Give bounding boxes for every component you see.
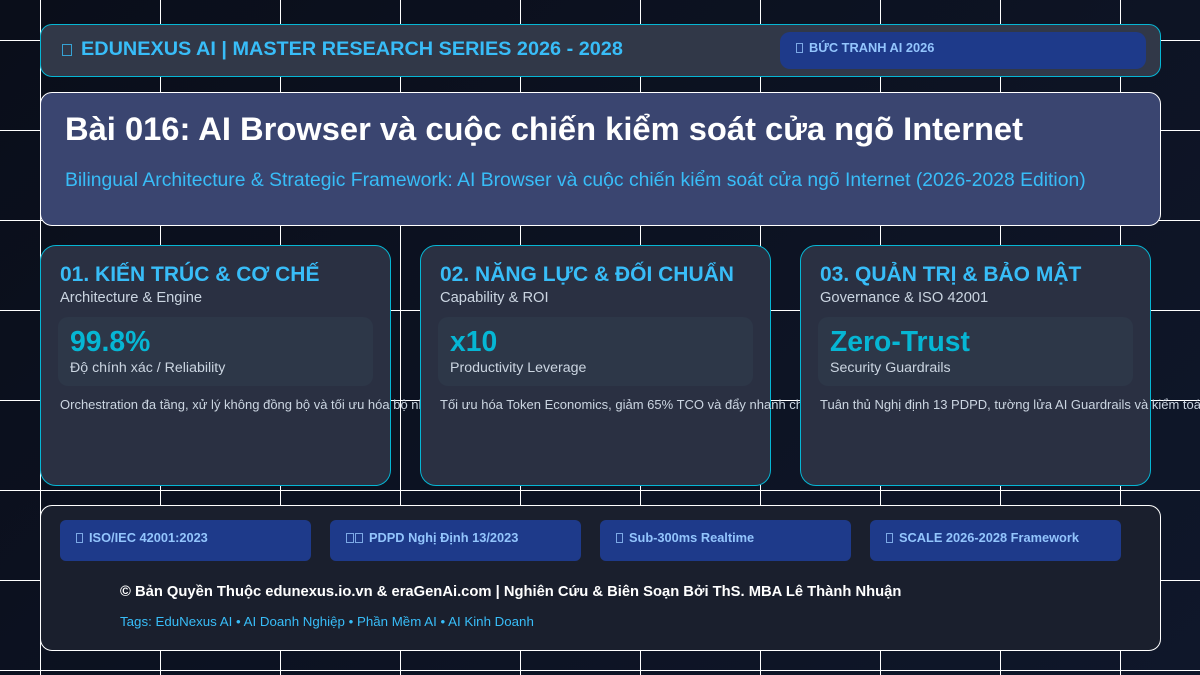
panel: capability card <box>420 245 771 486</box>
card subheading: Capability & ROI <box>440 290 549 306</box>
badge: realtime <box>600 520 851 561</box>
stat box: productivity <box>438 317 753 386</box>
footer panel <box>40 505 1161 651</box>
card description: Tối ưu hóa Token Economics, giảm 65% TCO và đẩy nhanh chu kỳ triển khai cho doanh nghiệp trên toàn hệ thống. <box>440 397 1103 412</box>
badge: PDPD <box>330 520 581 561</box>
badge: section label <box>780 32 1146 69</box>
stat box: reliability <box>58 317 373 386</box>
tags line: Tags: EduNexus AI • AI Doanh Nghiệp • Phần Mềm AI • AI Kinh Doanh <box>120 614 534 629</box>
subtitle: Bilingual Architecture & Strategic Framework: AI Browser và cuộc chiến kiểm soát cửa ngõ Internet (2026-2028 Edition) <box>65 170 1086 191</box>
brand heading: EDUNEXUS AI | MASTER RESEARCH SERIES 2026 - 2028 <box>81 38 623 60</box>
card subheading: Architecture & Engine <box>60 290 202 306</box>
badge text: BỨC TRANH AI 2026 <box>809 40 934 55</box>
stat label: Security Guardrails <box>830 360 951 376</box>
stat value: Zero-Trust <box>830 325 970 357</box>
stat label: Productivity Leverage <box>450 360 586 376</box>
badge text: ISO/IEC 42001:2023 <box>89 530 208 545</box>
badge text: Sub-300ms Realtime <box>629 530 754 545</box>
card description: Orchestration đa tầng, xử lý không đồng bộ và tối ưu hóa bộ nhớ ngữ cảnh cho tác tử AI trên trình duyệt. <box>60 397 664 412</box>
card subheading: Governance & ISO 42001 <box>820 290 988 306</box>
stat value: x10 <box>450 325 497 357</box>
badge text: SCALE 2026-2028 Framework <box>899 530 1079 545</box>
badge text: PDPD Nghị Định 13/2023 <box>369 530 518 545</box>
card heading: 01. KIẾN TRÚC & CƠ CHẾ <box>60 263 319 286</box>
main title: Bài 016: AI Browser và cuộc chiến kiểm soát cửa ngõ Internet <box>65 110 1023 147</box>
copyright line: © Bản Quyền Thuộc edunexus.io.vn & eraGenAi.com | Nghiên Cứu & Biên Soạn Bởi ThS. MBA Lê Thành Nhuận <box>120 584 901 600</box>
hero panel <box>40 92 1161 226</box>
card heading: 03. QUẢN TRỊ & BẢO MẬT <box>820 263 1081 286</box>
panel: architecture card <box>40 245 391 486</box>
panel: governance card <box>800 245 1151 486</box>
stat value: 99.8% <box>70 325 150 357</box>
header bar <box>40 24 1161 77</box>
card heading: 02. NĂNG LỰC & ĐỐI CHUẨN <box>440 263 734 286</box>
badge: ISO <box>60 520 311 561</box>
badge: framework <box>870 520 1121 561</box>
stat label: Độ chính xác / Reliability <box>70 360 225 376</box>
stat box: security <box>818 317 1133 386</box>
